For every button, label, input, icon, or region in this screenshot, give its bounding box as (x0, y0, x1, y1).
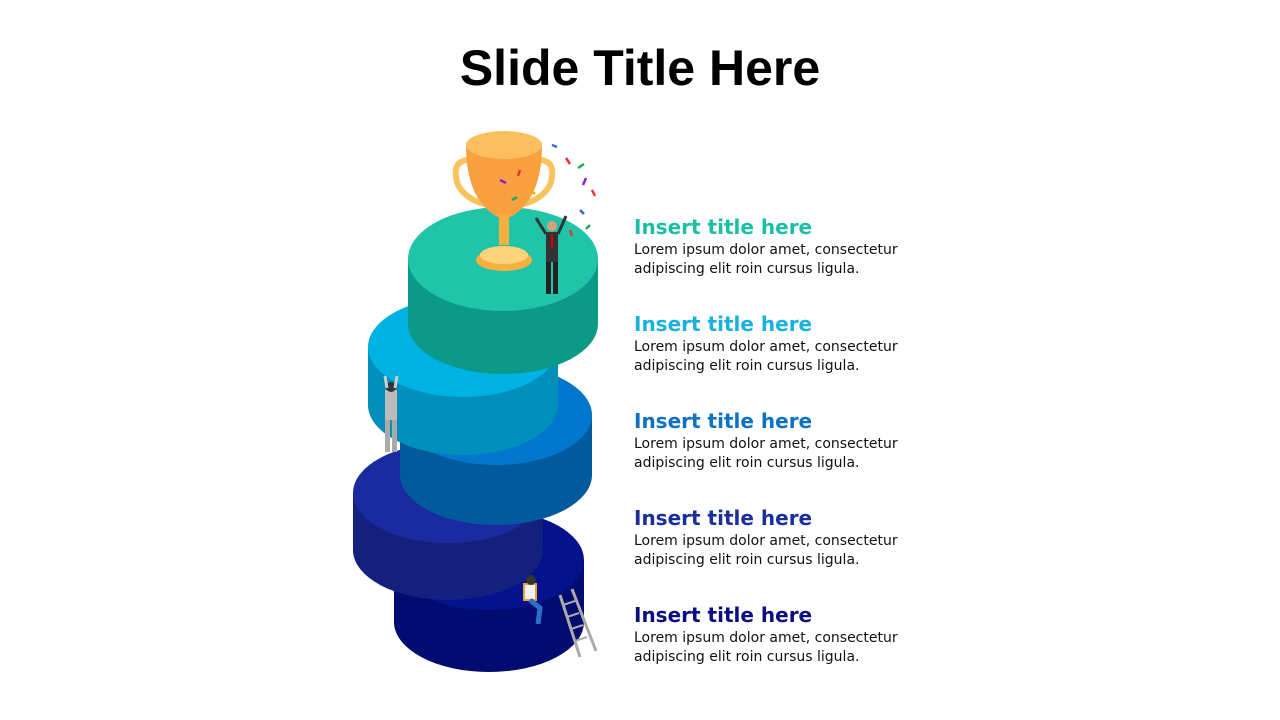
icon: trophy (456, 131, 552, 271)
cylinder 3 blue (400, 365, 592, 525)
icon: confetti (500, 145, 595, 236)
cylinder 2 light blue (368, 297, 558, 455)
text block 1: Lorem ipsum dolor amet, consectetur (634, 242, 898, 258)
text block 3: adipiscing elit roin cursus ligula. (634, 455, 859, 471)
text block 3: Lorem ipsum dolor amet, consectetur (634, 436, 898, 452)
cylinder 4 dark blue (353, 443, 543, 600)
text block 1: Insert title here (634, 215, 812, 239)
text block 4: Insert title here (634, 506, 812, 530)
text block 5: Lorem ipsum dolor amet, consectetur (634, 630, 898, 646)
text block 2: Insert title here (634, 312, 812, 336)
text block 5: adipiscing elit roin cursus ligula. (634, 649, 859, 665)
text block 5 (634, 603, 898, 665)
title: Slide Title Here (460, 40, 820, 96)
text block 1 (634, 215, 898, 277)
icon: sitting man with ladder (524, 575, 596, 657)
text block 2 (634, 312, 898, 374)
text block 4 (634, 506, 898, 568)
text block 4: Lorem ipsum dolor amet, consectetur (634, 533, 898, 549)
cylinder 5 navy (394, 510, 584, 672)
icon: climbing man (385, 376, 397, 452)
text block 2: Lorem ipsum dolor amet, consectetur (634, 339, 898, 355)
text block 3 (634, 409, 898, 471)
text block 4: adipiscing elit roin cursus ligula. (634, 552, 859, 568)
text block 2: adipiscing elit roin cursus ligula. (634, 358, 859, 374)
cylinder 1 teal (408, 207, 598, 374)
text block 3: Insert title here (634, 409, 812, 433)
text block 5: Insert title here (634, 603, 812, 627)
text block 1: adipiscing elit roin cursus ligula. (634, 261, 859, 277)
icon: celebrating man (536, 216, 566, 294)
